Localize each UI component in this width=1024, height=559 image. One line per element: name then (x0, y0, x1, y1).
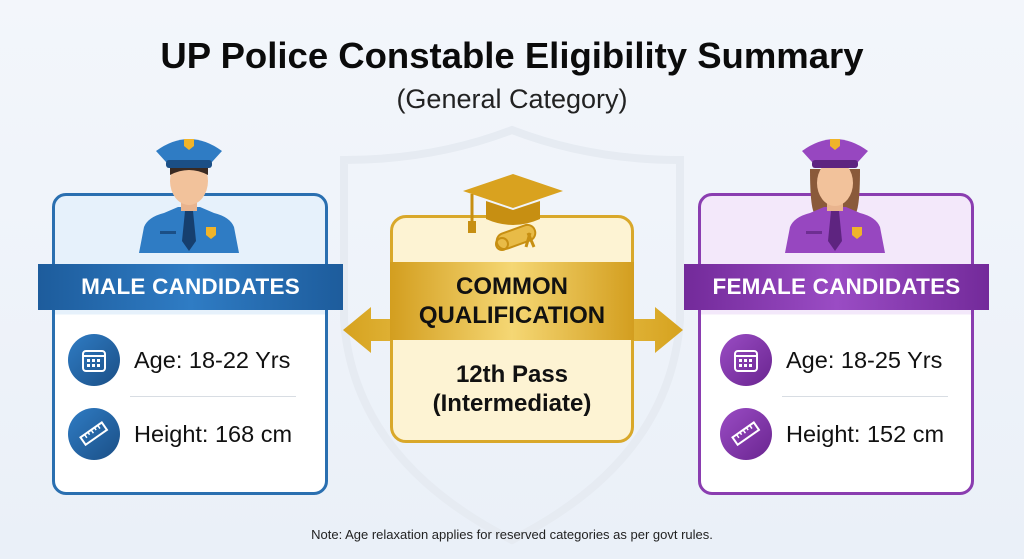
band (390, 262, 634, 340)
band: COMMON (456, 273, 568, 300)
icon: calendar (720, 334, 772, 386)
subtitle: (General Category) (396, 84, 628, 114)
icon: male officer (139, 139, 239, 253)
banner: female candidates (684, 264, 989, 310)
row: height: Height: 152 cm (786, 420, 944, 446)
row: age (720, 334, 942, 386)
row: height (68, 408, 292, 460)
band: QUALIFICATION (419, 302, 605, 329)
text: 12th pass (433, 361, 591, 417)
icon: calendar (68, 334, 120, 386)
text: 12th pass: 12th Pass (456, 361, 568, 388)
icon: graduation cap and diploma (463, 174, 563, 251)
row: height: Height: 168 cm (134, 420, 292, 446)
title: UP Police Constable Eligibility Summary (160, 35, 864, 76)
banner: female candidates: FEMALE CANDIDATES (712, 274, 960, 299)
row: age (68, 334, 290, 386)
banner: male candidates (38, 264, 343, 310)
row: height (720, 408, 944, 460)
note: Note: Age relaxation applies for reserved categories as per govt rules. (311, 527, 713, 542)
panel: common qualification (390, 174, 634, 443)
text: 12th pass: (Intermediate) (433, 390, 591, 417)
row: age: Age: 18-25 Yrs (786, 346, 942, 372)
arrow: double gold (343, 307, 683, 353)
row: age: Age: 18-22 Yrs (134, 346, 290, 372)
panel: male (38, 139, 343, 495)
panel: female (684, 139, 989, 495)
icon: ruler (720, 408, 772, 460)
icon: female officer (785, 139, 885, 253)
banner: male candidates: MALE CANDIDATES (81, 274, 300, 299)
icon: ruler (68, 408, 120, 460)
background shield (340, 126, 684, 308)
